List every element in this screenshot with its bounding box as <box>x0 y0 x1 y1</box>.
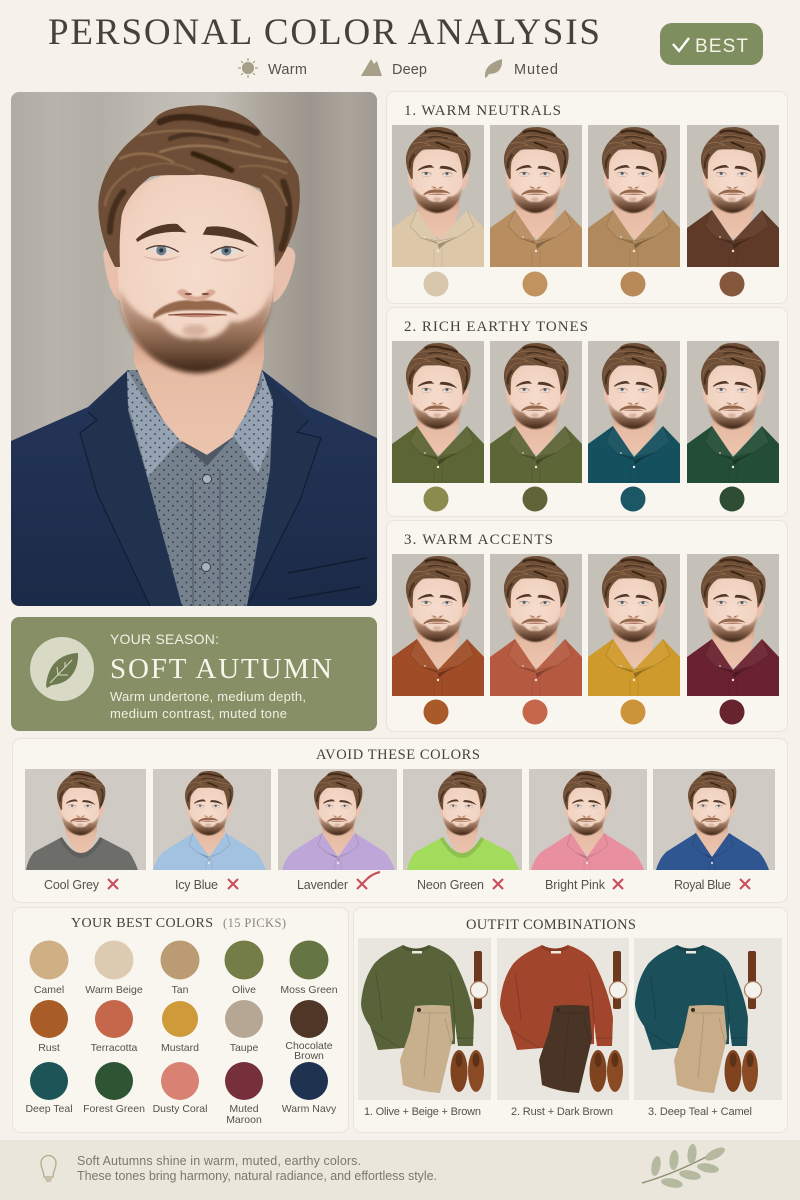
label: bright pink: Bright Pink <box>545 878 606 892</box>
label: outfit 1: 1. Olive + Beige + Brown <box>364 1106 481 1118</box>
swatch names: Camel <box>34 984 64 996</box>
icon: cross <box>740 879 750 889</box>
swatch names: Taupe <box>230 1042 258 1054</box>
icon: cross <box>108 879 118 889</box>
tip text: Soft Autumns shine in warm, muted, earthy colors. <box>77 1154 361 1168</box>
panel: warm neutrals <box>386 92 788 304</box>
heading: OUTFIT COMBINATIONS <box>466 917 636 933</box>
panel: rich earthy tones <box>386 308 788 516</box>
title: PERSONAL COLOR ANALYSIS <box>48 12 600 53</box>
swatch names: Warm Beige <box>85 984 143 996</box>
panel: your season <box>11 617 377 731</box>
photo: bright pink <box>529 769 647 870</box>
icon: leaf sprig <box>642 1144 727 1189</box>
photo: tan shirt <box>588 125 680 267</box>
badge: best <box>660 23 763 65</box>
photo: camel shirt <box>490 125 582 267</box>
icon: cross <box>493 879 503 889</box>
photo: beige shirt <box>392 125 484 267</box>
icon: light bulb <box>41 1156 56 1181</box>
description: Warm undertone, medium depth, <box>110 689 306 704</box>
photo: neon green <box>403 769 522 870</box>
heading: 2. RICH EARTHY TONES <box>404 319 588 335</box>
label: your season: YOUR SEASON: <box>110 631 219 647</box>
swatch names: Terracotta <box>91 1042 138 1054</box>
label: warm: Warm <box>268 62 307 78</box>
heading: 3. WARM ACCENTS <box>404 532 553 548</box>
label: muted: Muted <box>514 62 558 78</box>
attribute row: warm, deep, muted <box>238 58 558 78</box>
photo: terracotta shirt <box>490 554 582 696</box>
icon: mountain <box>361 59 382 76</box>
heading: AVOID THESE COLORS <box>316 747 480 763</box>
panel: your best colors <box>12 908 348 1132</box>
photo: rust shirt <box>392 554 484 696</box>
photo: royal blue <box>653 769 775 870</box>
swatch names <box>25 984 338 1126</box>
swatch names: Olive <box>232 984 256 996</box>
label: deep: Deep <box>392 62 427 78</box>
label: icy blue: Icy Blue <box>175 878 218 892</box>
footer band <box>0 1140 800 1200</box>
swatch names: Moss Green <box>280 984 338 996</box>
swatch names: Maroon <box>226 1114 262 1126</box>
outfit 3 <box>634 938 782 1100</box>
label: neon green: Neon Green <box>417 878 484 892</box>
swatches <box>424 486 744 512</box>
photo: icy blue <box>153 769 271 870</box>
photo: brown shirt <box>687 125 779 267</box>
photo: forest shirt <box>687 341 779 483</box>
swatches <box>424 272 744 296</box>
swatch names: Rust <box>38 1042 60 1054</box>
icon: leaf <box>485 59 502 78</box>
outfit 1 <box>358 938 491 1100</box>
count note: (15 PICKS) <box>223 916 286 930</box>
panel: warm accents <box>386 520 788 732</box>
photo: moss shirt <box>490 341 582 483</box>
outfit 2 <box>497 938 629 1100</box>
label: outfit 3: 3. Deep Teal + Camel <box>648 1106 752 1118</box>
photo: teal shirt <box>588 341 680 483</box>
swatch names: Forest Green <box>83 1103 145 1115</box>
panel: outfit combinations <box>354 908 788 1132</box>
swatch names: Warm Navy <box>282 1103 337 1115</box>
photo: cool grey <box>25 769 146 870</box>
heading: 1. WARM NEUTRALS <box>404 103 561 119</box>
icon: cross <box>613 879 623 889</box>
photo: lavender <box>278 769 397 870</box>
icon: leaf badge <box>30 637 94 701</box>
swatch names: Chocolate <box>285 1040 333 1052</box>
swatch names: Brown <box>294 1050 324 1062</box>
label: outfit 2: 2. Rust + Dark Brown <box>511 1106 613 1118</box>
photo: olive shirt <box>392 341 484 483</box>
main portrait <box>11 92 377 606</box>
swatch circles <box>30 940 328 1100</box>
heading: soft autumn: SOFT AUTUMN <box>110 653 332 685</box>
badge: best: BEST <box>695 36 748 57</box>
swatch names: Tan <box>172 984 189 996</box>
icon: sun <box>238 58 258 78</box>
icon: cross <box>228 879 238 889</box>
swatch names: Mustard <box>161 1042 199 1054</box>
swatch names: Muted <box>229 1103 259 1115</box>
swatch names: Deep Teal <box>25 1103 73 1115</box>
swatch names: Dusty Coral <box>153 1103 207 1115</box>
label: royal blue: Royal Blue <box>674 878 731 892</box>
icon: cross with flourish <box>357 872 380 889</box>
panel: avoid these colors <box>12 738 788 902</box>
photo: maroon shirt <box>687 554 779 696</box>
label: lavender: Lavender <box>297 878 348 892</box>
label: cool grey: Cool Grey <box>44 878 100 892</box>
photo: mustard shirt <box>588 554 680 696</box>
description: medium contrast, muted tone <box>110 706 287 721</box>
heading: YOUR BEST COLORS <box>71 916 213 931</box>
tip text: These tones bring harmony, natural radiance, and effortless style. <box>77 1169 437 1183</box>
swatches <box>424 700 744 724</box>
